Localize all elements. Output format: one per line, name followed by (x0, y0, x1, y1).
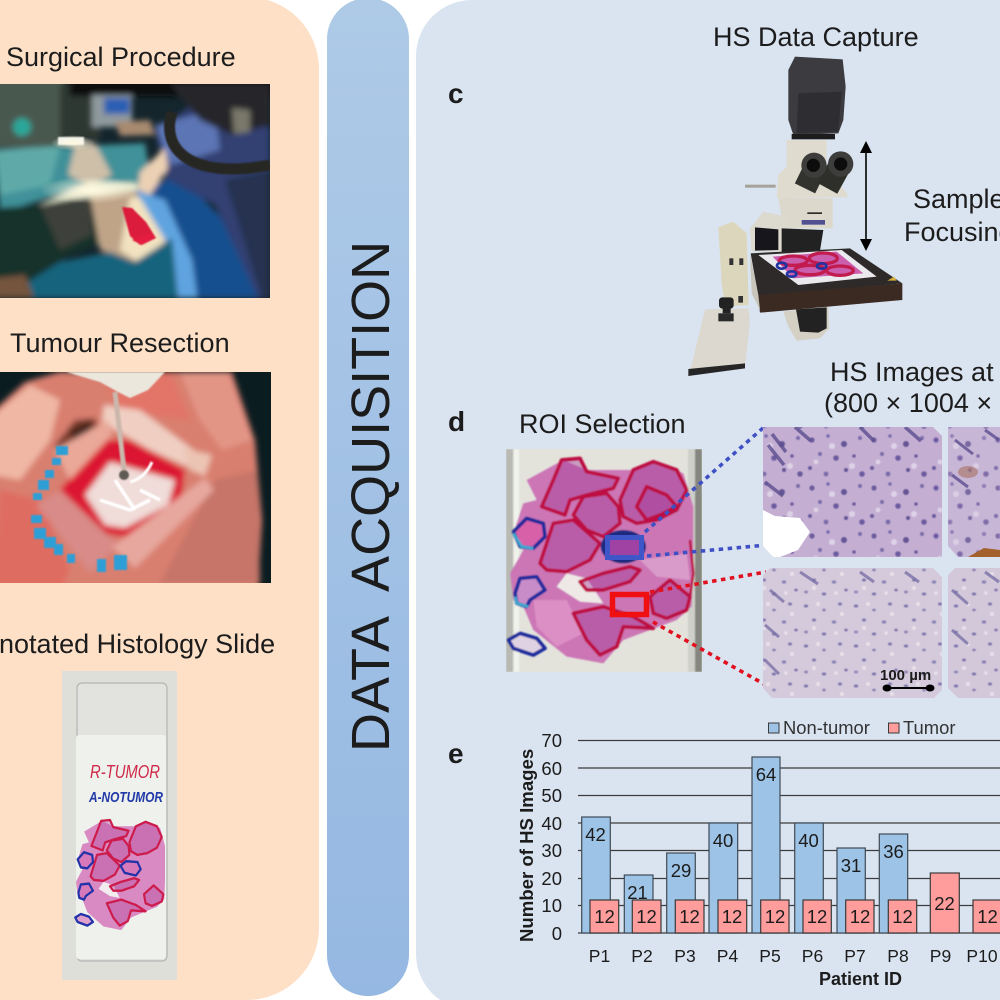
non-tumor values: 42 (585, 824, 606, 845)
y axis ticks: 50 (541, 785, 562, 806)
photo: surgical procedure (0, 76, 280, 298)
chart legend: Tumor (903, 717, 955, 738)
non-tumor values: 29 (671, 860, 691, 881)
x axis labels: P10 (966, 946, 998, 966)
y axis title: Number of HS Images (516, 749, 537, 942)
heading: HS Data Capture: HS Data Capture (713, 22, 919, 52)
ROI box: blue (608, 538, 642, 558)
x axis labels: P9 (930, 946, 951, 966)
non-tumor bars (582, 757, 908, 933)
photo: tumour resection (0, 372, 271, 590)
x axis labels: P6 (802, 946, 823, 966)
heading: Surgical Procedure: Surgical Procedure (6, 42, 236, 72)
microscope body (777, 140, 847, 197)
tumor values: 12 (892, 906, 913, 927)
panel label d: d (448, 406, 465, 437)
non-tumor values: 40 (798, 830, 819, 851)
tumor values: 12 (679, 906, 700, 927)
tumor values: 12 (594, 906, 615, 927)
y axis ticks: 30 (541, 840, 562, 861)
panel: right acquisition background (416, 0, 1000, 1000)
x axis labels: P8 (887, 946, 909, 966)
panel: left clinical background (0, 0, 319, 1000)
tumor values: 22 (934, 893, 955, 914)
y axis ticks: 60 (541, 758, 562, 779)
photo: ROI selection slide (506, 449, 702, 672)
slide label: A-NOTUMOR: A-NOTUMOR (88, 789, 163, 806)
HS image tile: tumor 1 (763, 568, 942, 698)
y axis ticks (541, 730, 562, 944)
non-tumor values: 40 (713, 830, 733, 851)
text: Sample Focusing (904, 184, 1000, 247)
tumor values (594, 893, 998, 927)
scale bar: 100 µm (880, 667, 934, 692)
y axis ticks: 0 (552, 923, 562, 944)
y axis ticks: 40 (541, 813, 562, 834)
panel label c: c (448, 78, 464, 109)
non-tumor values: 21 (627, 882, 648, 903)
microscope eyepieces (805, 166, 816, 188)
chart legend (768, 717, 955, 738)
stage (751, 248, 902, 296)
heading: ROI Selection: ROI Selection (519, 409, 686, 439)
arrow: sample focusing (860, 141, 872, 251)
text: vertical band title: DATA ACQUISITION (341, 241, 401, 752)
non-tumor values (585, 764, 904, 903)
connector: red zoom lines (650, 572, 766, 684)
tumor values: 12 (636, 906, 657, 927)
grid lines (578, 740, 1000, 933)
tumor values: 12 (722, 906, 742, 927)
x axis labels: P1 (589, 946, 610, 966)
illustration: hyperspectral microscope (688, 57, 902, 376)
photo: annotated histology slide (62, 671, 177, 980)
chart legend: Non-tumor (783, 717, 870, 738)
tumor bars (590, 873, 1000, 933)
joystick controller (688, 308, 750, 372)
tumor values: 12 (807, 906, 827, 927)
heading: Tumour Resection: Tumour Resection (10, 328, 230, 358)
y axis ticks: 70 (541, 730, 562, 751)
ROI box: red (612, 594, 646, 614)
slide tissue (75, 820, 165, 930)
x axis title: Patient ID (819, 969, 902, 989)
HS image tile: tumor 2 (948, 568, 1000, 698)
x axis labels: P4 (717, 946, 738, 966)
x axis labels: P2 (631, 946, 653, 966)
HS image tile: non-tumor 2 (948, 427, 1000, 557)
y axis ticks: 10 (541, 895, 562, 916)
slide label: R-TUMOR: R-TUMOR (90, 762, 160, 782)
tumor values: 12 (977, 906, 998, 927)
x axis labels: P3 (674, 946, 696, 966)
control box (718, 222, 749, 307)
tumor values: 12 (765, 906, 785, 927)
non-tumor values: 64 (756, 764, 776, 785)
connector: blue zoom lines (645, 428, 767, 556)
microscope base (783, 307, 829, 341)
non-tumor values: 36 (883, 841, 904, 862)
x axis labels: P5 (759, 946, 781, 966)
scale bar: 100 µm: 100 µm (880, 667, 931, 684)
heading: HS Images at: (800 × 1004 × (824, 388, 992, 418)
non-tumor values: 31 (841, 855, 861, 876)
y axis ticks: 20 (541, 868, 562, 889)
x axis labels: P7 (844, 946, 866, 966)
tumor values: 12 (850, 906, 870, 927)
x axis labels (589, 946, 998, 966)
HS image tile: non-tumor 1 (763, 427, 942, 557)
panel label e: e (448, 738, 464, 769)
heading: HS Images at: HS Images at (830, 357, 994, 387)
microscope camera (788, 57, 846, 135)
heading: HS Images at (824, 357, 994, 418)
bar chart: HS images per patient (516, 717, 1000, 989)
panel: data acquisition band (327, 0, 409, 996)
